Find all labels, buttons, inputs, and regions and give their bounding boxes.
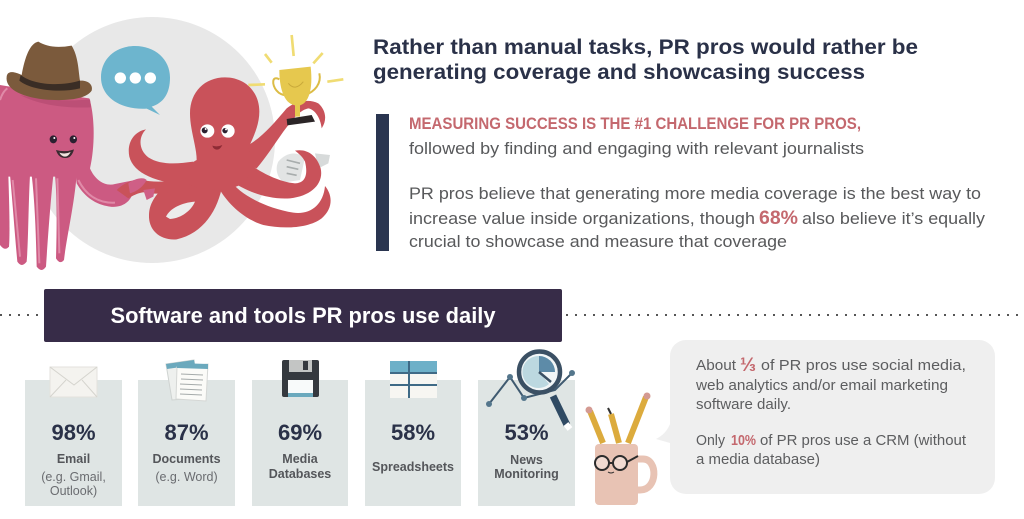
title: Rather than manual tasks, PR pros would rather be bbox=[373, 36, 918, 59]
newspaper bbox=[277, 153, 330, 183]
background circle bbox=[29, 17, 275, 263]
card: spreadsheets bbox=[365, 361, 461, 506]
trophy rays bbox=[248, 35, 343, 85]
tentacle right bbox=[230, 150, 321, 199]
card: media databases: Media bbox=[282, 452, 319, 466]
callout bbox=[656, 340, 995, 494]
card: spreadsheets: 58% bbox=[391, 420, 435, 445]
head and body bbox=[185, 77, 259, 190]
icon: magnifying glass with line chart bbox=[486, 352, 575, 429]
tentacle lower left bbox=[149, 177, 223, 239]
callout: About bbox=[696, 358, 736, 374]
callout: ⅓ bbox=[740, 355, 756, 376]
icon: table bbox=[390, 361, 437, 398]
card: spreadsheets: Spreadsheets bbox=[372, 460, 454, 474]
red octopus bbox=[117, 77, 331, 239]
trophy base bbox=[287, 115, 315, 125]
hat bbox=[7, 42, 92, 100]
title bbox=[373, 36, 918, 84]
card: media databases: Databases bbox=[269, 467, 331, 481]
card: news monitoring: 53% bbox=[504, 420, 549, 445]
callout: of PR pros use social media, bbox=[761, 358, 966, 374]
text block: value: 68% bbox=[759, 208, 798, 229]
card: news monitoring: Monitoring bbox=[494, 467, 559, 481]
tentacle loop hole bbox=[166, 202, 195, 219]
card: documents bbox=[138, 360, 235, 506]
tentacle upper right bbox=[240, 101, 325, 168]
card: documents: (e.g. Word) bbox=[155, 470, 218, 484]
icon: documents bbox=[166, 360, 208, 401]
trophy bbox=[273, 67, 320, 117]
card: email: Email bbox=[57, 452, 90, 466]
text block: value: increase value inside organizations, though bbox=[409, 210, 755, 228]
section heading: Software and tools PR pros use daily bbox=[110, 303, 496, 328]
text block: challenge bbox=[409, 114, 864, 158]
text block: value: crucial to showcase and measure that coverage bbox=[409, 233, 787, 251]
text block: value bbox=[409, 185, 986, 251]
card: media databases: 69% bbox=[278, 420, 322, 445]
text block: challenge: followed by finding and engaging with relevant journalists bbox=[409, 140, 864, 158]
red octopus face bbox=[200, 124, 235, 150]
text block: challenge: MEASURING SUCCESS IS THE #1 CHALLENGE FOR PR PROS, bbox=[409, 114, 861, 133]
arm handshake bbox=[117, 170, 200, 198]
title: generating coverage and showcasing success bbox=[373, 61, 865, 84]
hand overlap bbox=[128, 178, 155, 200]
icon: envelope bbox=[50, 367, 97, 397]
icon: floppy disk bbox=[282, 360, 319, 397]
text block: value: PR pros believe that generating more media coverage is the best way to bbox=[409, 185, 981, 203]
card: media databases bbox=[252, 360, 348, 506]
card: email: Outlook) bbox=[50, 484, 97, 498]
callout: of PR pros use a CRM (without bbox=[760, 433, 966, 449]
icon: mug with pencils and glasses bbox=[586, 392, 654, 505]
card: documents: 87% bbox=[164, 420, 209, 445]
callout: 10% bbox=[731, 433, 756, 449]
card: news monitoring bbox=[478, 380, 575, 506]
tentacle upper left bbox=[129, 129, 193, 185]
section heading bbox=[44, 289, 562, 342]
speech bubble bbox=[101, 46, 170, 115]
text block: value: also believe it’s equally bbox=[802, 210, 986, 228]
vertical accent bar bbox=[376, 114, 389, 251]
callout: a media database) bbox=[696, 452, 820, 468]
card: email: 98% bbox=[51, 420, 96, 445]
card: email: (e.g. Gmail, bbox=[41, 470, 106, 484]
illustration: octopuses bbox=[0, 17, 343, 270]
callout: Only bbox=[696, 433, 726, 449]
card: email bbox=[25, 367, 122, 506]
card: news monitoring: News bbox=[510, 453, 543, 467]
callout: web analytics and/or email marketing bbox=[695, 378, 948, 394]
pink octopus bbox=[0, 85, 144, 270]
callout: software daily. bbox=[696, 397, 791, 413]
card: documents: Documents bbox=[152, 452, 221, 466]
tentacle lower right bbox=[220, 180, 331, 227]
